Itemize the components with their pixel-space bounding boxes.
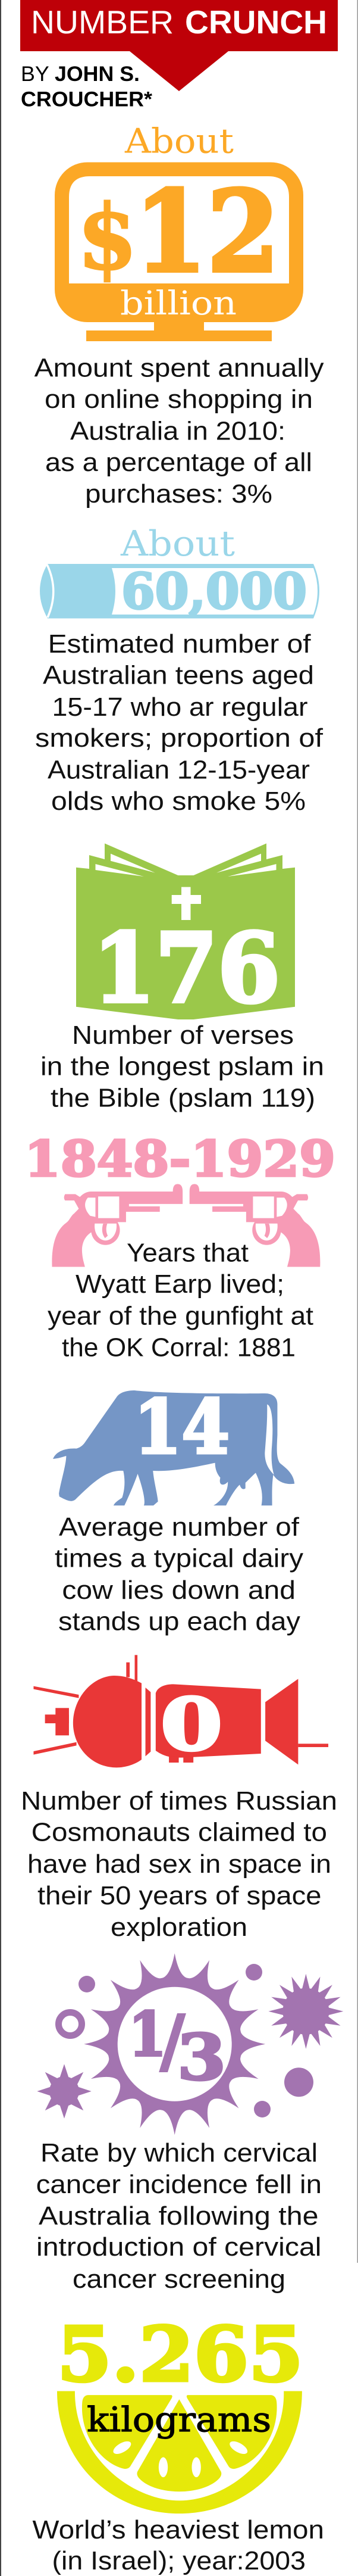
caption [35, 629, 324, 816]
caption [36, 2138, 322, 2294]
caption: smokers; proportion of [35, 723, 324, 753]
header banner [20, 0, 338, 91]
caption: exploration [111, 1913, 247, 1942]
caption: Wyatt Earp lived; [76, 1270, 284, 1299]
caption [21, 1786, 337, 1942]
caption: olds who smoke 5% [51, 787, 306, 816]
figure: 1/3: 3 [177, 2020, 226, 2094]
figure: 0: 0 [161, 1683, 222, 1767]
byline: CROUCHER* [21, 88, 152, 111]
caption: the OK Corral: 1881 [62, 1333, 296, 1362]
icon: dots and ring [58, 1964, 313, 2117]
figure: 1/3: / [159, 1999, 186, 2082]
unit: kilograms: kilograms [87, 2400, 271, 2440]
byline: BY JOHN S. [21, 63, 140, 86]
caption: Australian teens aged [43, 661, 314, 690]
title [31, 4, 327, 40]
caption: 15-17 who ar regular [52, 693, 308, 722]
caption: on online shopping in [45, 385, 313, 414]
icon: main cell burst [84, 1953, 265, 2135]
caption [40, 1021, 324, 1113]
panel: teen smokers [35, 523, 324, 816]
caption: Years that [127, 1239, 249, 1268]
caption: cancer incidence fell in [36, 2170, 322, 2199]
panel: cervical cancer [36, 1953, 343, 2294]
panel: Wyatt Earp [24, 1131, 335, 1362]
figure: $12: 12 [134, 166, 280, 298]
caption: their 50 years of space [37, 1881, 321, 1910]
caption: Cosmonauts claimed to [32, 1818, 327, 1847]
panel: bible verses [40, 843, 324, 1113]
caption: cancer screening [73, 2265, 285, 2294]
caption: year of the gunfight at [48, 1302, 313, 1331]
figure: 60,000: 60,000 [121, 563, 307, 620]
caption: World’s heaviest lemon [32, 2515, 324, 2544]
caption [55, 1512, 303, 1636]
icon: cross [172, 887, 201, 920]
caption: Estimated number of [48, 629, 311, 659]
icon: cigarette [40, 564, 319, 618]
figure: 14: 14 [134, 1384, 230, 1471]
panel: dairy cow [53, 1384, 303, 1636]
icon: open book [76, 843, 295, 1019]
figure: 1848-1929: 1848-1929 [24, 1131, 335, 1188]
icon: spacecraft [33, 1655, 328, 1767]
caption: in the longest pslam in [40, 1052, 324, 1081]
caption: Rate by which cervical [40, 2138, 318, 2168]
figure: 1/3 [128, 1999, 226, 2094]
caption: have had sex in space in [27, 1850, 331, 1879]
about label: About [120, 523, 235, 564]
caption: stands up each day [58, 1607, 300, 1636]
caption [34, 354, 324, 509]
caption: times a typical dairy [55, 1544, 303, 1573]
caption: (in Israel); year:2003 [52, 2546, 306, 2575]
icon: small spiky cell [37, 2064, 92, 2119]
icon: left revolver [52, 1184, 183, 1267]
caption: Australian 12-15-year [48, 755, 310, 785]
icon: computer monitor [55, 162, 303, 341]
caption: Average number of [59, 1512, 300, 1542]
caption: Australia following the [39, 2201, 319, 2231]
panel: cosmonauts [21, 1655, 337, 1942]
caption: purchases: 3% [85, 479, 272, 509]
about label: About [124, 121, 234, 161]
caption: Number of times Russian [21, 1786, 337, 1816]
caption [32, 2515, 324, 2575]
figure: 1/3: 1 [128, 1999, 167, 2070]
title: CRUNCH [185, 4, 327, 40]
icon: lemon slice [57, 2391, 302, 2513]
icon: right revolver [190, 1184, 320, 1267]
panel: heaviest lemon [32, 2310, 324, 2575]
figure: $12 [77, 166, 280, 298]
byline [21, 63, 152, 111]
caption: as a percentage of all [45, 448, 312, 477]
caption [48, 1239, 313, 1362]
figure: $12: $ [77, 185, 137, 290]
title: NUMBER [31, 4, 174, 40]
caption: Amount spent annually [34, 354, 324, 382]
caption: Australia in 2010: [70, 417, 285, 445]
caption: introduction of cervical [36, 2232, 321, 2262]
figure: 5.265: 5.265 [57, 2310, 303, 2399]
icon: cow [53, 1390, 294, 1505]
icon: large spiky cell [268, 1974, 343, 2049]
caption: Number of verses [72, 1021, 294, 1050]
caption: the Bible (pslam 119) [51, 1084, 315, 1113]
unit: billion: billion [120, 284, 237, 322]
panel: online shopping [34, 121, 324, 509]
caption: cow lies down and [62, 1576, 296, 1605]
figure: 176: 176 [93, 912, 280, 1024]
